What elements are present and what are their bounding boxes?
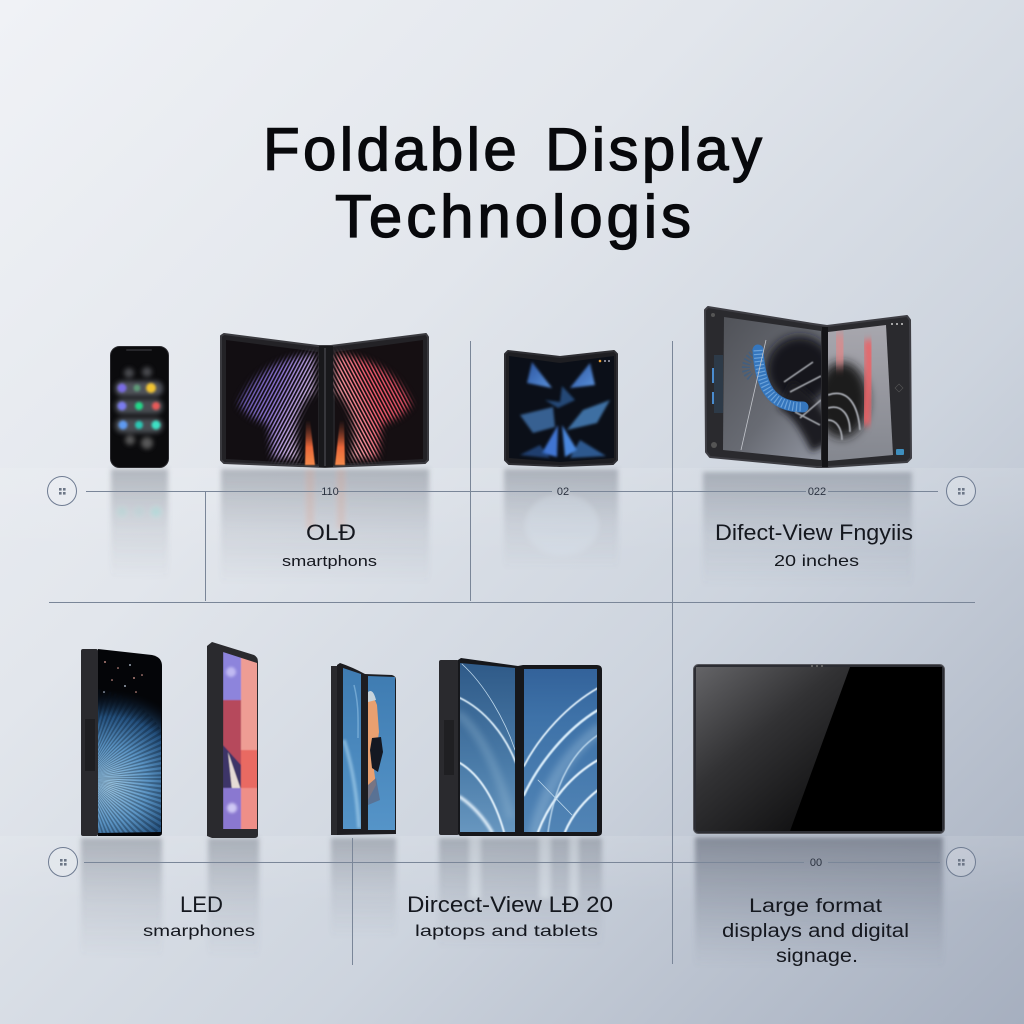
grid lines xyxy=(49,341,975,965)
portrait figure xyxy=(368,691,383,805)
label: Direct-View 20 inches: 20 inches xyxy=(774,553,859,570)
label: Direct-View LED laptops and tablets: laptops and tablets xyxy=(415,923,598,940)
title: Foldable Display xyxy=(263,116,762,183)
device: upright foldable with coloured tiles xyxy=(207,642,258,838)
device: large foldable with fan wallpaper xyxy=(221,334,428,467)
row one right circle icon xyxy=(946,476,976,506)
label: Direct-View LED laptops and tablets: Dircect-View LĐ 20 xyxy=(407,892,613,917)
orange glow streaks xyxy=(305,420,345,465)
row two left circle icon xyxy=(48,848,78,876)
title xyxy=(263,116,762,250)
label: OLED smartphones: OLĐ xyxy=(306,520,356,545)
floor surface row one xyxy=(0,468,1024,558)
reflections of devices xyxy=(81,469,943,967)
label: Direct-View 20 inches xyxy=(715,520,913,570)
right red fan xyxy=(333,349,416,465)
device: dual-panel foldable with light streaks xyxy=(439,658,602,836)
row two right circle icon xyxy=(946,848,976,876)
label: Direct-View 20 inches: Difect-View Fngyiis xyxy=(715,520,913,545)
axis number 00: 00 xyxy=(810,857,822,869)
axis number 02: 02 xyxy=(557,486,569,498)
label: large format displays: signage. xyxy=(776,946,858,967)
device: smartphone with app icons xyxy=(110,346,168,468)
label: LED smartphones: smarphones xyxy=(143,923,255,940)
axis number 022: 022 xyxy=(808,486,826,498)
device: tablet foldable with abstract render xyxy=(705,307,911,467)
floor surface row two xyxy=(0,836,1024,906)
device: compact foldable with blue art xyxy=(505,351,617,466)
row one left circle icon xyxy=(48,476,76,506)
label: large format displays: Large format xyxy=(749,896,883,917)
label: Direct-View LED laptops and tablets xyxy=(407,892,613,940)
label: OLED smartphones: smartphons xyxy=(282,553,377,570)
title: Technologis xyxy=(335,183,691,250)
axis number 110: 110 xyxy=(321,486,339,498)
label: OLED smartphones xyxy=(282,520,377,570)
device: narrow foldable with portrait xyxy=(331,663,396,835)
left purple fan xyxy=(234,349,319,465)
label: large format displays: displays and digital xyxy=(722,921,909,942)
device: tall foldable with blue fan xyxy=(81,649,162,836)
label: LED smartphones xyxy=(143,892,255,940)
label: large format displays xyxy=(722,896,909,967)
device: large format display xyxy=(694,664,944,834)
label: LED smartphones: LED xyxy=(180,892,223,917)
